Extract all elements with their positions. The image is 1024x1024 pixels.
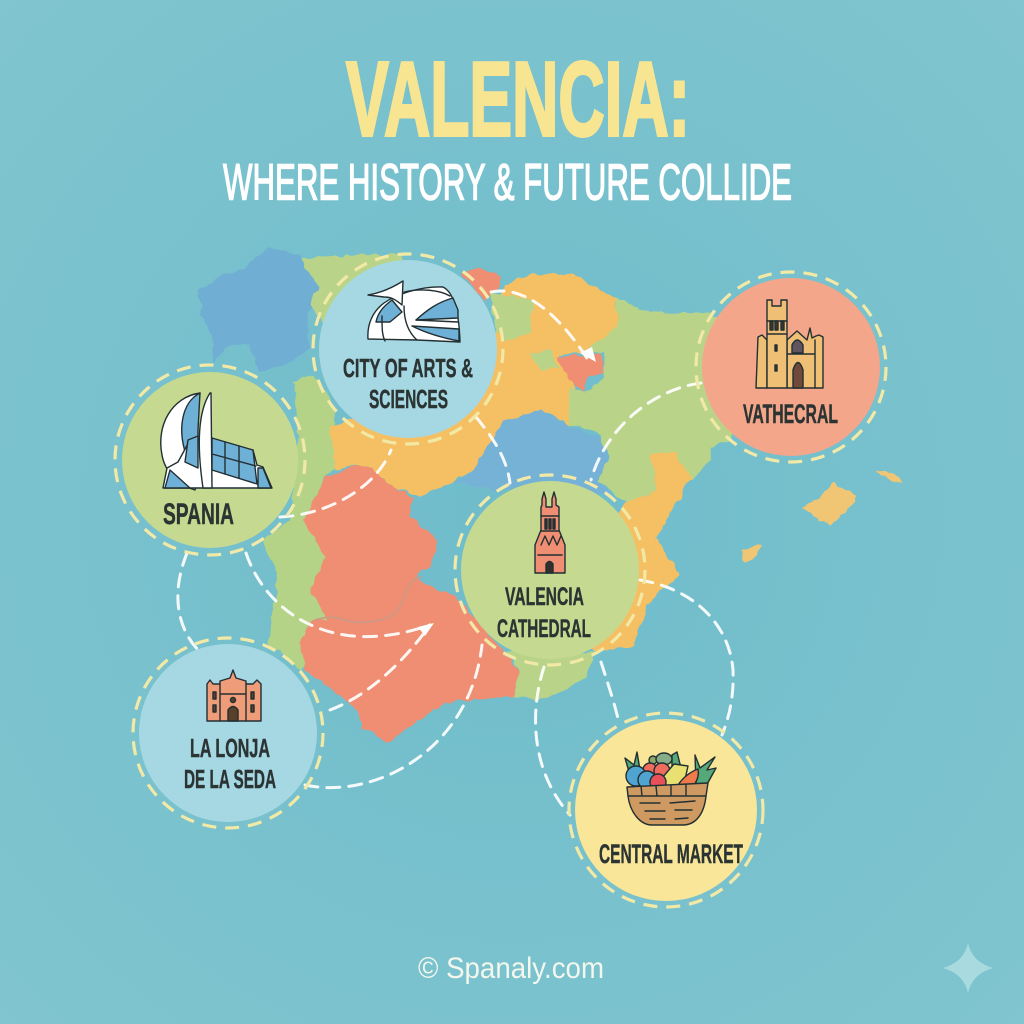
- label: SCIENCES: [369, 384, 448, 414]
- label: CITY OF ARTS &: [343, 353, 473, 383]
- label: CATHEDRAL: [497, 615, 591, 643]
- map of Spain: [198, 247, 903, 743]
- region: Murcia: [508, 650, 594, 700]
- label: VALENCIA: [505, 583, 584, 611]
- node: Valencia Cathedral: [455, 475, 645, 665]
- route connectors: [178, 291, 733, 815]
- label: SPANIA: [163, 498, 234, 531]
- region: Valencia coast: [580, 453, 692, 653]
- region: west strip: [262, 375, 345, 670]
- region: Asturias: [303, 254, 420, 340]
- icon: La Lonja building: [207, 670, 261, 721]
- title: VALENCIA:: [346, 40, 690, 158]
- region: central blue: [455, 410, 612, 495]
- icon: cathedral tower: [535, 492, 565, 573]
- arrow tip top: [580, 347, 596, 362]
- label: VATHECRAL: [743, 399, 838, 429]
- river border: [315, 577, 422, 622]
- region: small green: [530, 350, 559, 370]
- label: CENTRAL MARKET: [599, 839, 743, 869]
- label: LA LONJA: [190, 733, 270, 763]
- region: Basque: [460, 268, 501, 300]
- region: central orange: [330, 273, 617, 497]
- icon: sparkle: [943, 943, 993, 993]
- region: north-east green: [569, 297, 745, 503]
- icon: cathedral: [756, 300, 823, 388]
- node: Spania: [115, 365, 305, 555]
- node: Central Market: [569, 713, 763, 907]
- region: small red: [557, 353, 605, 393]
- region: Galicia: [198, 247, 319, 373]
- region: Rioja green: [491, 293, 534, 343]
- islands: Balearics: [740, 471, 903, 562]
- icon: futuristic building: [368, 281, 460, 342]
- label: DE LA SEDA: [184, 764, 276, 794]
- node: City of Arts & Sciences: [313, 254, 503, 444]
- region: Andalusia: [300, 577, 519, 743]
- icon: opera house: [161, 393, 272, 490]
- icon: vegetable basket: [625, 752, 716, 825]
- region: Extremadura: [303, 463, 439, 630]
- node: Vathecral: [696, 272, 886, 462]
- node: La Lonja de la Seda: [133, 638, 323, 828]
- footer credit: © Spanaly.com: [418, 952, 604, 985]
- arrowhead: [418, 623, 434, 636]
